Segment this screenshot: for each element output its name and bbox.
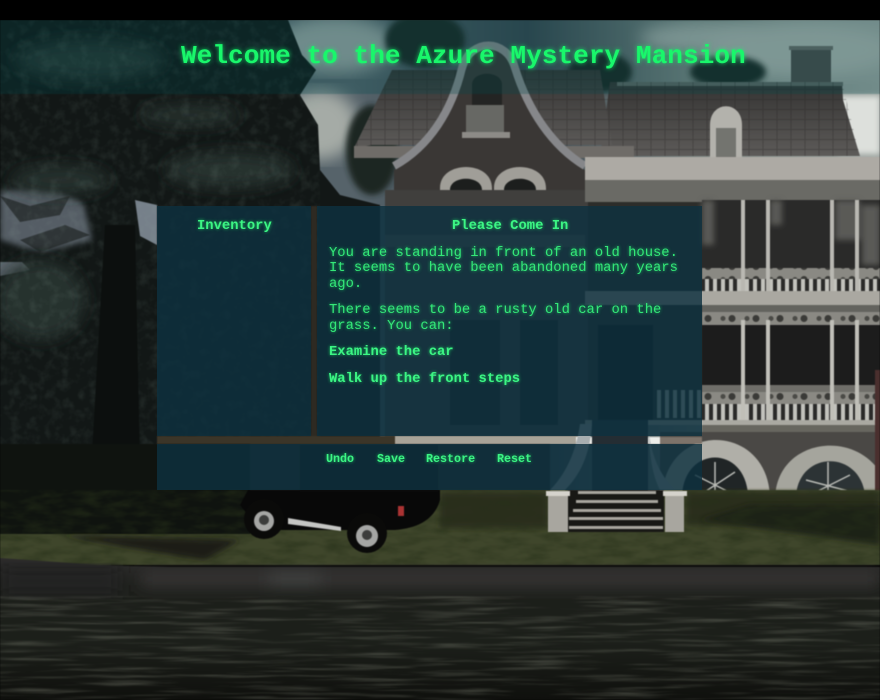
choice: walk up the front steps: Walk up the front steps [329,371,520,387]
inventory panel [157,206,311,436]
footer command panel [157,444,702,490]
mansion cornice [585,157,880,180]
lower veranda with fretwork and railing [585,305,880,435]
grass behind car and dark ground [0,444,880,565]
main story panel [317,206,702,436]
large tree on the left [0,20,380,490]
bark strip between panels [311,206,317,436]
header band tint [0,20,880,94]
porch staircase [546,420,687,532]
inventory heading: Inventory [197,218,272,234]
distant treetops behind roof [346,12,766,195]
command: save: Save [377,452,405,466]
mansion roof and chimney [354,46,860,440]
top black bar [0,0,880,20]
story paragraph one: You are standing in front of an old house. It seems to have been abandoned many years ago. [329,244,678,292]
command: undo: Undo [326,452,354,466]
sky with clouds [0,17,880,500]
lake with reflected bank [0,558,880,700]
title: Welcome to the Azure Mystery Mansion [181,41,746,71]
story heading: Please Come In [452,218,568,234]
choice: examine the car: Examine the car [329,344,454,360]
basement arches [660,370,880,510]
command: restore: Restore [426,452,475,466]
mansion front wall and porch behind the panels [385,180,880,440]
story paragraph two: There seems to be a rusty old car on the grass. You can: [329,302,661,334]
paired arched windows of the central bay [440,167,546,205]
upper veranda with fretwork and railing [585,180,880,305]
foundation band by front door [157,436,702,445]
black car on the grass [240,445,440,553]
command: reset: Reset [497,452,532,466]
